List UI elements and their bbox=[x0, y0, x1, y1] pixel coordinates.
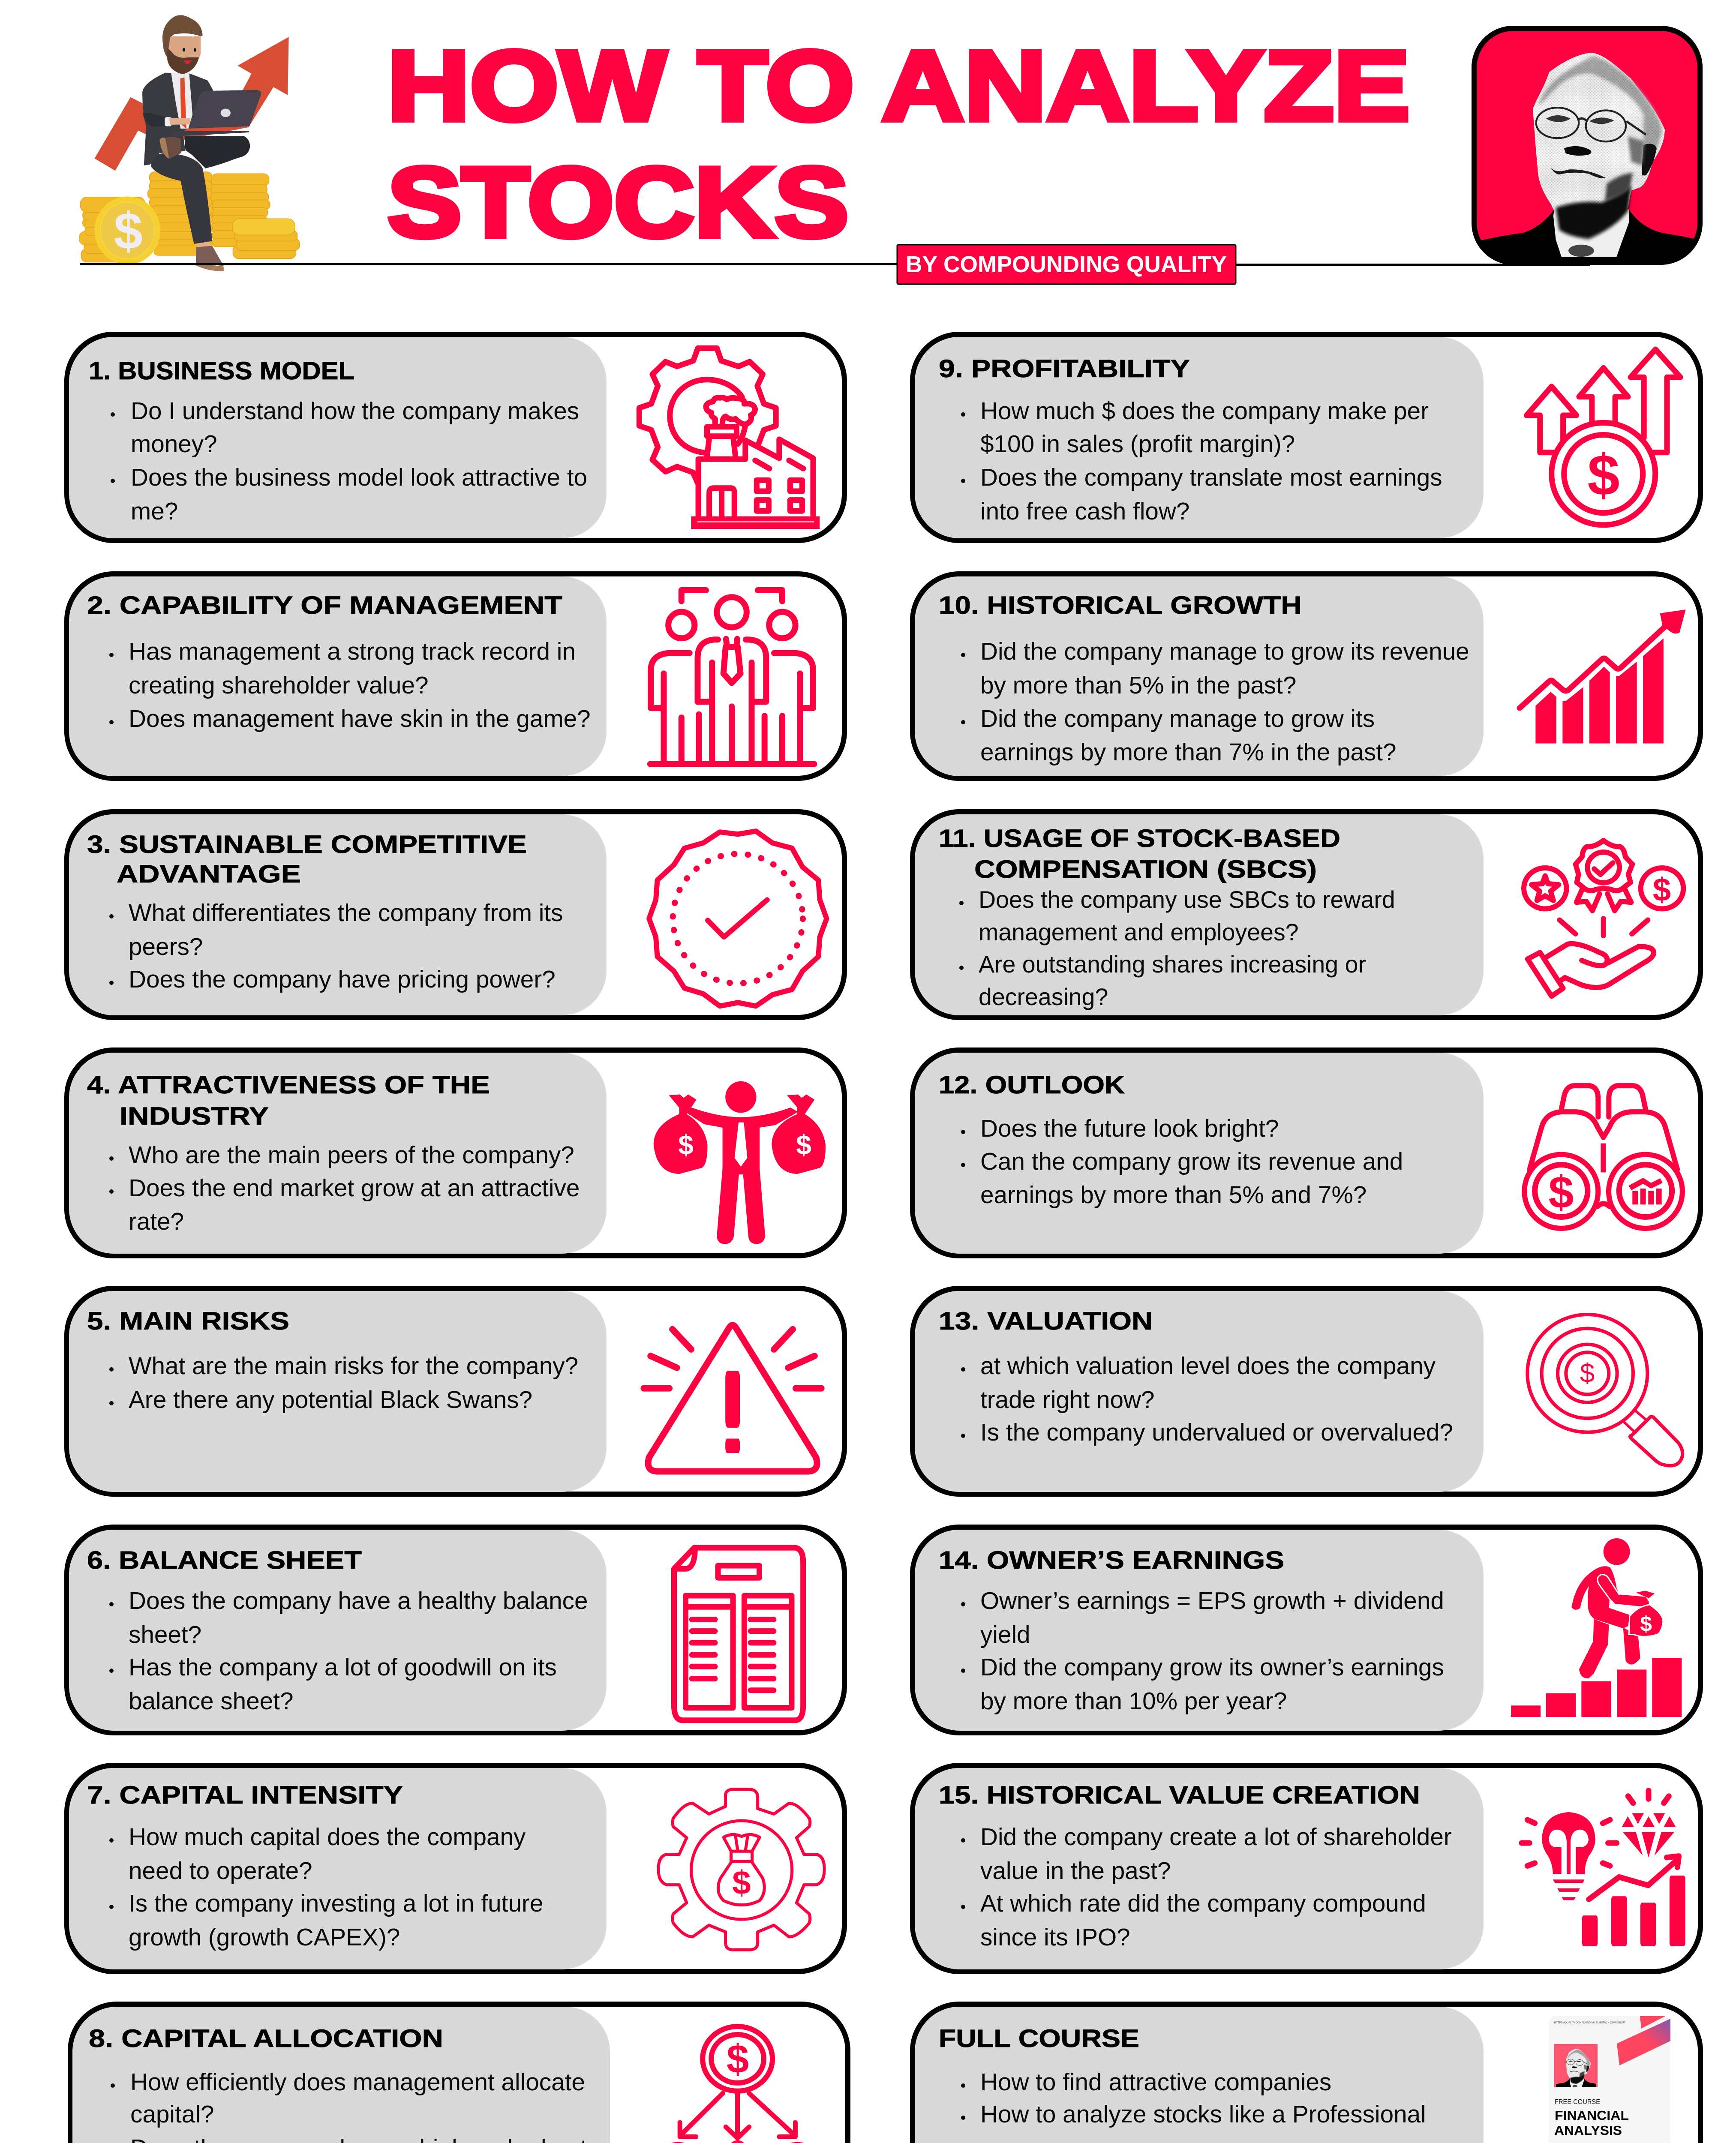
big dollar coin bbox=[95, 196, 160, 264]
bullet list bbox=[961, 638, 1469, 766]
bullet list bbox=[961, 1353, 1453, 1446]
bullet list: How to analyze stocks like a Professional bbox=[980, 2101, 1426, 2128]
icon: capital allocation tree bbox=[655, 2026, 820, 2143]
icon: balance sheet document bbox=[674, 1548, 803, 1720]
panel: 7. capital intensity bbox=[67, 1765, 844, 1972]
bullet list bbox=[961, 1588, 1444, 1715]
heading: 3. SUSTAINABLE COMPETITIVE bbox=[87, 831, 527, 858]
bullet list: money? bbox=[131, 431, 217, 458]
heading: COMPENSATION (SBCS) bbox=[974, 855, 1317, 883]
bullet list: management and employees? bbox=[979, 919, 1299, 945]
icon: person holding money bags bbox=[654, 1081, 826, 1244]
heading: 6. BALANCE SHEET bbox=[87, 1546, 362, 1574]
icon: hand with reward badges bbox=[1524, 840, 1683, 996]
panel: 12. outlook bbox=[913, 1050, 1700, 1256]
header rule left bbox=[80, 263, 898, 265]
bullet list: since its IPO? bbox=[980, 1924, 1130, 1951]
portrait: investor on red bbox=[1474, 28, 1700, 262]
bullet list: Has the company a lot of goodwill on its bbox=[129, 1654, 557, 1681]
heading bbox=[87, 831, 527, 888]
course booklet cover: FREE COURSE bbox=[1555, 2098, 1600, 2106]
panel: 3. sustainable competitive advantage bbox=[67, 812, 844, 1017]
bullet list: How much $ does the company make per bbox=[980, 398, 1429, 425]
bullet list: Does the company have a healthy balance bbox=[129, 1588, 588, 1615]
panel: 5. main risks bbox=[67, 1288, 844, 1494]
heading: 8. CAPITAL ALLOCATION bbox=[89, 2025, 443, 2053]
header illustration: businessman on coins with growth arrow bbox=[79, 15, 300, 271]
panel: 11. usage of stock-based compensation bbox=[913, 812, 1700, 1017]
course booklet cover: HTTPS://QUALITYCOMPOUNDING.SUBSTACK.COM/ABOUT bbox=[1554, 2021, 1625, 2024]
panel: 2. capability of management bbox=[67, 574, 844, 778]
bullet list: at which valuation level does the company bbox=[980, 1353, 1436, 1380]
icon: growing bar chart with arrow bbox=[1520, 609, 1686, 743]
icon: capital allocation tree: $ bbox=[727, 2036, 749, 2081]
bullet list: me? bbox=[131, 498, 178, 525]
bullet list: peers? bbox=[129, 933, 203, 960]
icon: person climbing steps with money bag bbox=[1511, 1538, 1682, 1717]
heading bbox=[939, 825, 1340, 883]
bullet list: value in the past? bbox=[980, 1858, 1171, 1885]
heading: ADVANTAGE bbox=[117, 860, 301, 888]
heading: 11. USAGE OF STOCK-BASED bbox=[939, 825, 1340, 852]
bullet list: yield bbox=[980, 1621, 1030, 1648]
heading: 4. ATTRACTIVENESS OF THE bbox=[87, 1071, 490, 1099]
heading: 7. CAPITAL INTENSITY bbox=[87, 1781, 403, 1809]
icon: warning triangle bbox=[644, 1325, 821, 1471]
bullet list bbox=[959, 886, 1395, 1010]
heading: FULL COURSE bbox=[939, 2025, 1139, 2053]
stack of coins: left bbox=[79, 197, 145, 262]
icon: light bulb, diamond and chart bbox=[1522, 1791, 1685, 1946]
bullet list: sheet? bbox=[129, 1621, 201, 1648]
bullet list: growth (growth CAPEX)? bbox=[129, 1924, 400, 1951]
header rule right bbox=[1234, 264, 1590, 266]
bullet list: Does the end market grow at an attractive bbox=[129, 1175, 580, 1202]
bullet list bbox=[961, 1824, 1452, 1951]
panel: 8. capital allocation bbox=[70, 2004, 848, 2143]
icon: binoculars bbox=[1524, 1086, 1682, 1228]
bullet list: Did the company manage to grow its revenue bbox=[980, 638, 1469, 665]
icon: factory and gear bbox=[639, 348, 820, 529]
bullet list: What are the main risks for the company? bbox=[129, 1353, 578, 1380]
bullet list bbox=[961, 2069, 1426, 2128]
big dollar coin: $ bbox=[114, 202, 143, 260]
businessman figure bbox=[142, 15, 261, 271]
panel: 9. profitability bbox=[913, 334, 1700, 540]
bullet list: Does the business model look attractive to bbox=[131, 464, 587, 491]
heading bbox=[87, 1071, 490, 1130]
bullet list bbox=[109, 900, 563, 993]
icon: gear with money bag bbox=[658, 1789, 824, 1950]
bullet list: Did the company manage to grow its bbox=[980, 705, 1375, 732]
bullet list bbox=[109, 1824, 543, 1951]
icon: binoculars: $ bbox=[1549, 1167, 1574, 1218]
heading: 15. HISTORICAL VALUE CREATION bbox=[939, 1781, 1420, 1809]
bullet list: Did the company create a lot of shareholder bbox=[980, 1824, 1452, 1851]
bullet list: At which rate did the company compound bbox=[980, 1890, 1426, 1917]
icon: person climbing steps with money bag: $ bbox=[1640, 1612, 1652, 1636]
bullet list bbox=[109, 1142, 580, 1235]
panel: 14. owner's earnings bbox=[913, 1527, 1700, 1733]
bullet list: Is the company undervalued or overvalued? bbox=[980, 1419, 1453, 1446]
bullet list bbox=[109, 638, 591, 732]
icon: person holding money bags: $ bbox=[796, 1129, 811, 1160]
bullet list: Can the company grow its revenue and bbox=[980, 1148, 1403, 1175]
icon: hand with reward badges: $ bbox=[1653, 872, 1671, 908]
icon: coin with rising arrows bbox=[1527, 349, 1680, 525]
stack of coins: centre bbox=[148, 172, 213, 255]
icon: gear with money bag: $ bbox=[732, 1864, 751, 1901]
bullet list: capital? bbox=[130, 2101, 214, 2128]
bullet list: by more than 10% per year? bbox=[980, 1688, 1287, 1715]
title: HOW TO ANALYZE bbox=[387, 30, 1410, 141]
icon: person holding money bags: $ bbox=[678, 1129, 694, 1160]
panel: 15. historical value creation bbox=[913, 1765, 1700, 1972]
bullet list: earnings by more than 7% in the past? bbox=[980, 739, 1397, 766]
bullet list: How to find attractive companies bbox=[980, 2069, 1331, 2096]
heading: 2. CAPABILITY OF MANAGEMENT bbox=[87, 591, 562, 619]
heading: 13. VALUATION bbox=[939, 1307, 1153, 1335]
heading: 10. HISTORICAL GROWTH bbox=[939, 591, 1302, 619]
panel: 13. valuation bbox=[913, 1288, 1700, 1494]
panel: full course bbox=[913, 2004, 1700, 2143]
byline badge: BY COMPOUNDING QUALITY bbox=[906, 252, 1227, 277]
bullet list bbox=[961, 1115, 1403, 1209]
icon: coin with rising arrows: $ bbox=[1587, 443, 1620, 507]
bullet list: Owner’s earnings = EPS growth + dividend bbox=[980, 1588, 1444, 1615]
course booklet cover: ANALYSIS bbox=[1554, 2123, 1622, 2138]
icon: seal with check mark bbox=[649, 831, 826, 1006]
bullet list: $100 in sales (profit margin)? bbox=[980, 431, 1295, 458]
bullet list: earnings by more than 5% and 7%? bbox=[980, 1182, 1367, 1209]
bullet list: by more than 5% in the past? bbox=[980, 672, 1296, 699]
heading: INDUSTRY bbox=[120, 1102, 269, 1130]
bullet list: into free cash flow? bbox=[980, 498, 1189, 525]
panel: 10. historical growth bbox=[913, 574, 1700, 778]
title: STOCKS bbox=[387, 147, 849, 258]
bullet list: decreasing? bbox=[979, 984, 1108, 1010]
bullet list: Does the future look bright? bbox=[980, 1115, 1279, 1142]
icon: magnifying glass over coin: $ bbox=[1580, 1359, 1595, 1388]
bullet list bbox=[111, 398, 587, 525]
title bbox=[387, 30, 1410, 258]
bullet list: Did the company grow its owner’s earnings bbox=[980, 1654, 1444, 1681]
icon: magnifying glass over coin bbox=[1527, 1315, 1682, 1466]
panel: 4. attractiveness of the industry bbox=[67, 1050, 844, 1256]
byline badge bbox=[897, 245, 1236, 284]
bullet list: Has management a strong track record in bbox=[129, 638, 576, 665]
bullet list: Who are the main peers of the company? bbox=[129, 1142, 574, 1169]
bullet list: need to operate? bbox=[129, 1858, 312, 1885]
bullet list: Are outstanding shares increasing or bbox=[979, 951, 1366, 978]
bullet list: Does the company translate most earnings bbox=[980, 464, 1442, 491]
bullet list: creating shareholder value? bbox=[129, 672, 429, 699]
bullet list: rate? bbox=[129, 1208, 184, 1235]
bullet list: Does the company use SBCs to reward bbox=[979, 886, 1395, 913]
bullet list: Does management have skin in the game? bbox=[129, 705, 591, 732]
heading: 1. BUSINESS MODEL bbox=[89, 357, 354, 385]
course booklet cover bbox=[1549, 2016, 1670, 2143]
icon: management team bbox=[650, 590, 814, 764]
bullet list: What differentiates the company from its bbox=[129, 900, 563, 927]
panel: 1. business model bbox=[67, 334, 844, 540]
bullet list: Do I understand how the company makes bbox=[131, 398, 579, 425]
bullet list bbox=[109, 1588, 588, 1715]
panel: 6. balance sheet bbox=[67, 1527, 844, 1733]
heading: 12. OUTLOOK bbox=[939, 1071, 1125, 1099]
bullet list bbox=[111, 2069, 587, 2143]
heading: 9. PROFITABILITY bbox=[939, 355, 1190, 383]
bullet list bbox=[961, 398, 1442, 525]
bullet list: How much capital does the company bbox=[129, 1824, 526, 1851]
bullet list: balance sheet? bbox=[129, 1688, 294, 1715]
bullet list: Are there any potential Black Swans? bbox=[129, 1387, 532, 1414]
course booklet cover: FINANCIAL bbox=[1555, 2108, 1629, 2123]
bullet list: Is the company investing a lot in future bbox=[129, 1890, 543, 1917]
bullet list: trade right now? bbox=[980, 1387, 1155, 1414]
icon: rising red arrow bbox=[95, 37, 289, 171]
heading: 5. MAIN RISKS bbox=[87, 1307, 289, 1335]
bullet list bbox=[109, 1353, 578, 1414]
bullet list: How efficiently does management allocate bbox=[130, 2069, 585, 2096]
bullet list: Does the company have pricing power? bbox=[129, 966, 556, 993]
heading: 14. OWNER’S EARNINGS bbox=[939, 1546, 1284, 1574]
stack of coins: back right bbox=[210, 174, 270, 247]
stack of coins: front right bbox=[232, 219, 300, 259]
